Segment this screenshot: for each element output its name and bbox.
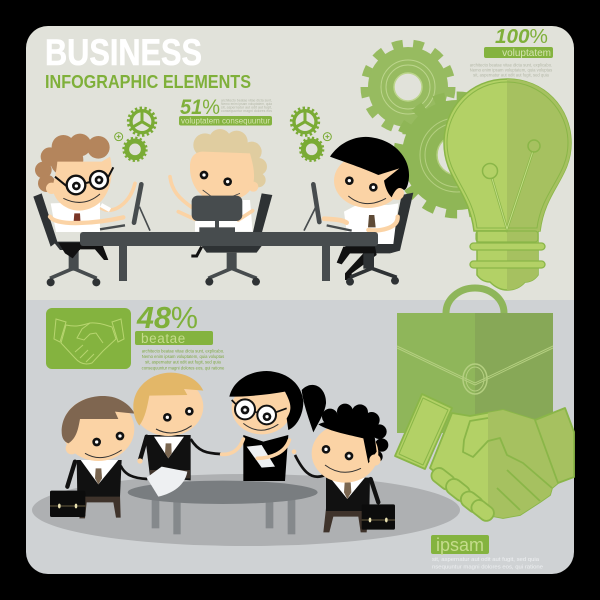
label: ipsam: sit, aspernatur aut odit aut fugit, sed quia xyxy=(432,557,539,563)
monitors and keyboards xyxy=(100,184,352,231)
icon box: handshake xyxy=(46,308,131,369)
table back xyxy=(128,481,318,534)
panel: bottom section background xyxy=(26,300,574,574)
stat: 48 percent: consequuntur magni dolores eos, qui ratione xyxy=(142,366,225,370)
person: curly black hair with briefcase xyxy=(292,404,395,532)
stat: 100 percent: 100% xyxy=(495,26,548,48)
stat: 48 percent: 48% xyxy=(136,300,198,335)
label: ipsam: nsequuntur magni dolores eos, qui ratione xyxy=(432,564,543,570)
person: blond with paper xyxy=(133,373,221,497)
person: woman with ponytail and glasses xyxy=(222,371,326,481)
person: left with glasses at desk xyxy=(33,134,135,286)
small gears left xyxy=(115,108,156,161)
stat: 48 percent: sit, aspernatur aut odit aut fugit, sed quia xyxy=(145,360,221,364)
small gears right xyxy=(291,108,331,161)
stat: 48 percent: architecto beatae vitae dicta sunt, explicabo. xyxy=(142,348,224,354)
stat: 100 percent: architecto beatae vitae dicta sunt, explicabo. xyxy=(470,62,552,68)
stat: 100 percent: Nemo enim ipsam voluptatem, quia voluptas xyxy=(470,68,552,72)
stat: 100 percent: sit, aspernatur aut odit aut fugit, sed quia xyxy=(473,72,549,78)
stat: 51 percent: architecto beatae vitae dicta sunt, xyxy=(221,98,272,102)
desk xyxy=(80,232,378,281)
person: middle behind laptop xyxy=(170,129,272,286)
title: BUSINESS xyxy=(45,32,202,73)
label: ipsam: ipsam xyxy=(436,535,484,555)
label: ipsam xyxy=(431,535,543,570)
briefcase xyxy=(397,288,553,433)
floor shadow xyxy=(32,474,460,546)
light bulb xyxy=(444,79,571,290)
person: brown hair with briefcase xyxy=(50,396,147,518)
person: right with black hair at desk xyxy=(324,137,413,286)
handshake large xyxy=(395,394,574,524)
large gear lower xyxy=(398,96,516,214)
stat: 48 percent: beatae xyxy=(141,331,186,346)
large gear upper xyxy=(365,44,451,130)
stat: 51 percent: voluptatem consequuntur xyxy=(181,116,270,126)
stat: 48 percent: Nemo enim ipsam voluptatem, quia voluptas xyxy=(142,354,224,359)
panel: top section background xyxy=(26,26,574,300)
subtitle: INFOGRAPHIC ELEMENTS xyxy=(45,72,251,92)
stat: 51 percent: consequuntur magni dolores eos xyxy=(221,109,272,113)
stat: 51 percent: 51% xyxy=(180,96,220,119)
stat: 100 percent: voluptatem xyxy=(502,48,551,59)
stat: 51 percent xyxy=(179,96,272,126)
stat: 48 percent xyxy=(135,300,225,370)
stat: 100 percent xyxy=(470,26,553,78)
stat: 51 percent: sit, aspernatur aut odit aut fugit, xyxy=(221,106,272,110)
stat: 51 percent: Nemo enim ipsam voluptatem, quia xyxy=(221,102,272,106)
